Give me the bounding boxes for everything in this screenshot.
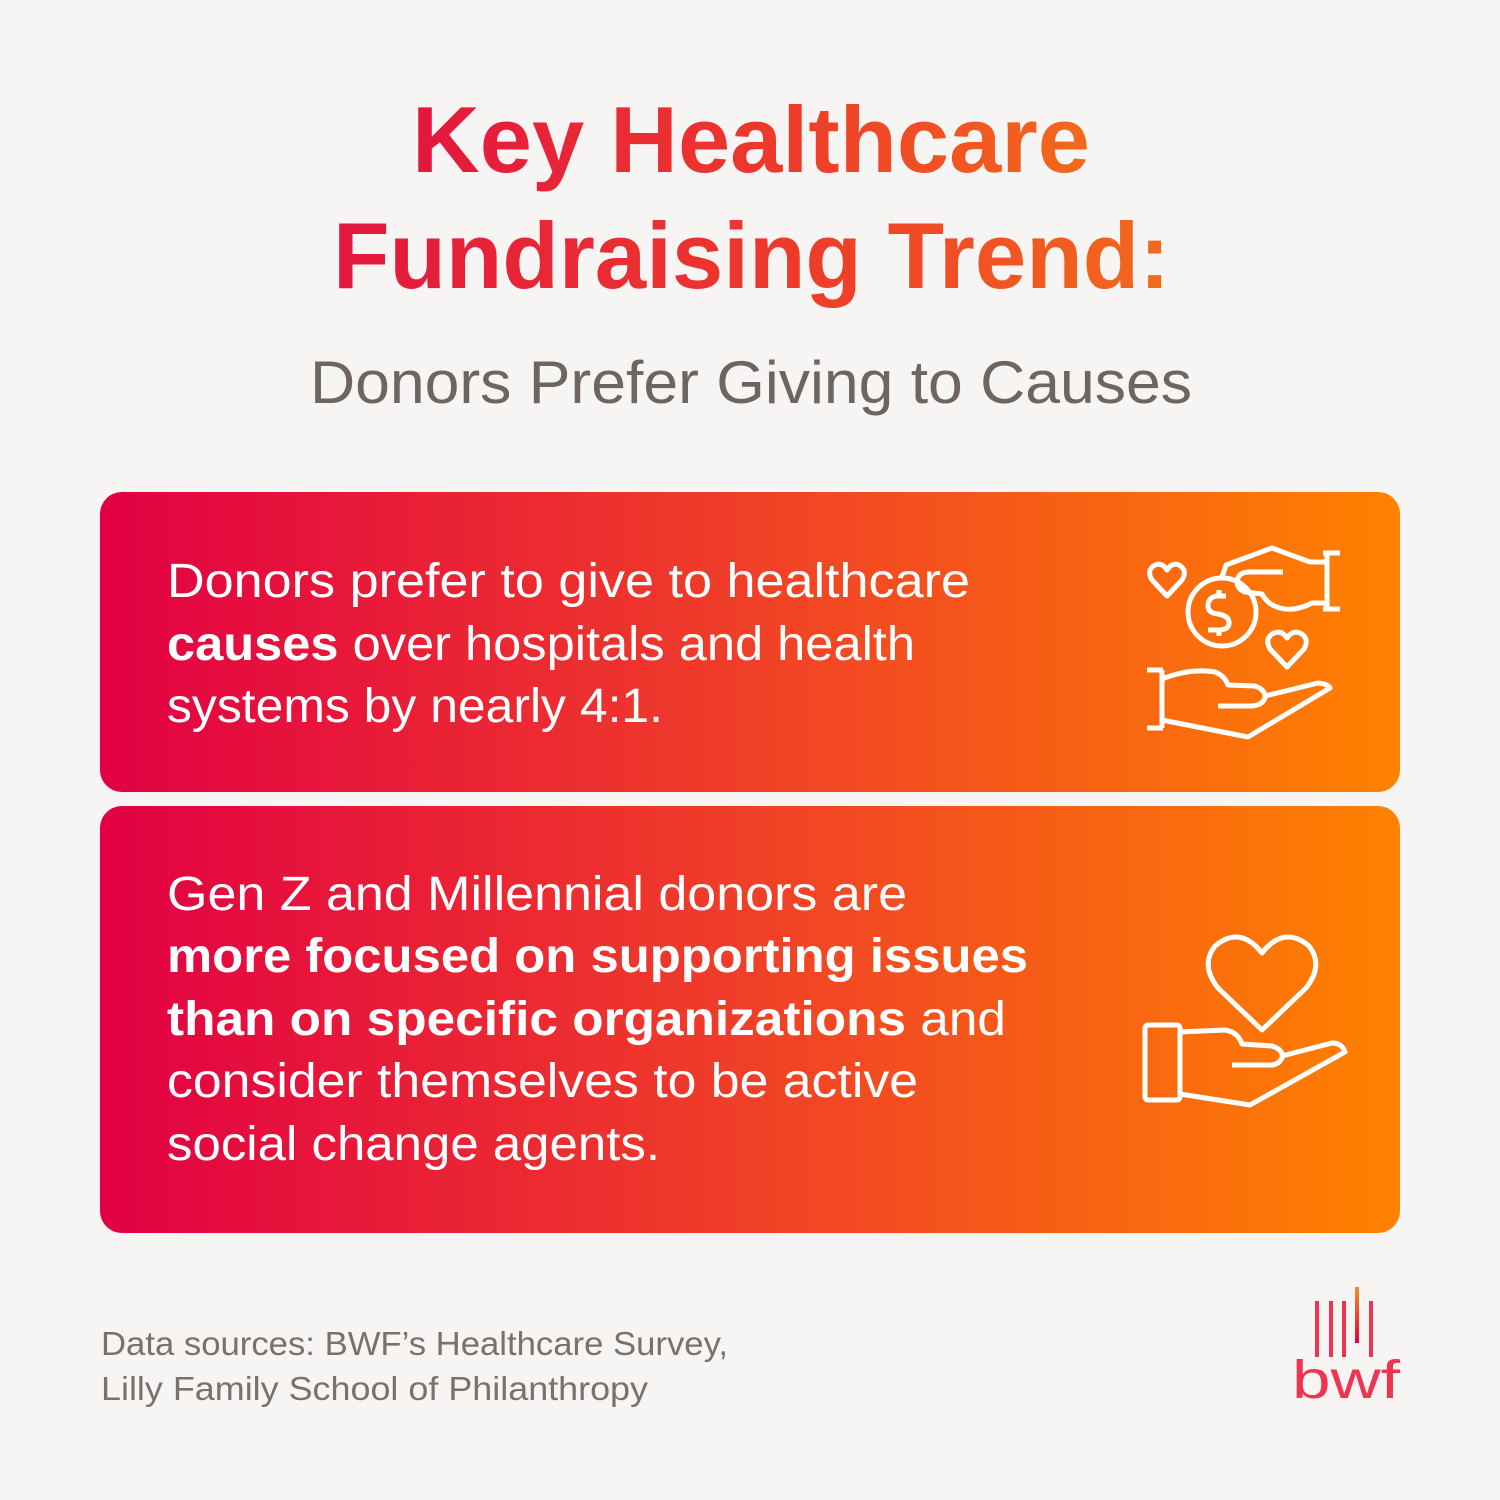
title: Fundraising Trend: <box>333 203 1170 308</box>
text block: card 2 <box>167 868 1028 1171</box>
text block: card 1: Donors prefer to give to healthcare <box>167 555 970 608</box>
text block: card 1 <box>167 555 970 733</box>
logo: bwf <box>1292 1287 1401 1410</box>
footer: data sources: Data sources: BWF’s Healthcare Survey, <box>101 1325 728 1362</box>
title <box>333 87 1170 308</box>
footer: data sources: Lilly Family School of Philanthropy <box>101 1370 649 1407</box>
text block: card 2: more focused on supporting issues <box>167 930 1028 983</box>
subtitle: Donors Prefer Giving to Causes <box>310 349 1192 416</box>
text block: card 2: Gen Z and Millennial donors are <box>167 868 907 921</box>
text block: card 1: causes over hospitals and health <box>167 618 915 671</box>
text block: card 1: systems by nearly 4:1. <box>167 680 663 733</box>
text block: card 2: consider themselves to be active <box>167 1055 918 1108</box>
icon: hands giving coin <box>1147 548 1340 737</box>
panel: Gen Z and Millennial donors <box>100 806 1400 1233</box>
footer: data sources <box>101 1325 728 1407</box>
icon: hand holding heart <box>1145 937 1345 1105</box>
logo: bwf: bwf <box>1292 1350 1401 1410</box>
panel: causes over hospitals <box>100 492 1400 792</box>
text block: card 2: than on specific organizations and <box>167 993 1006 1046</box>
text block: card 2: social change agents. <box>167 1118 660 1171</box>
title: Key Healthcare <box>412 87 1090 192</box>
